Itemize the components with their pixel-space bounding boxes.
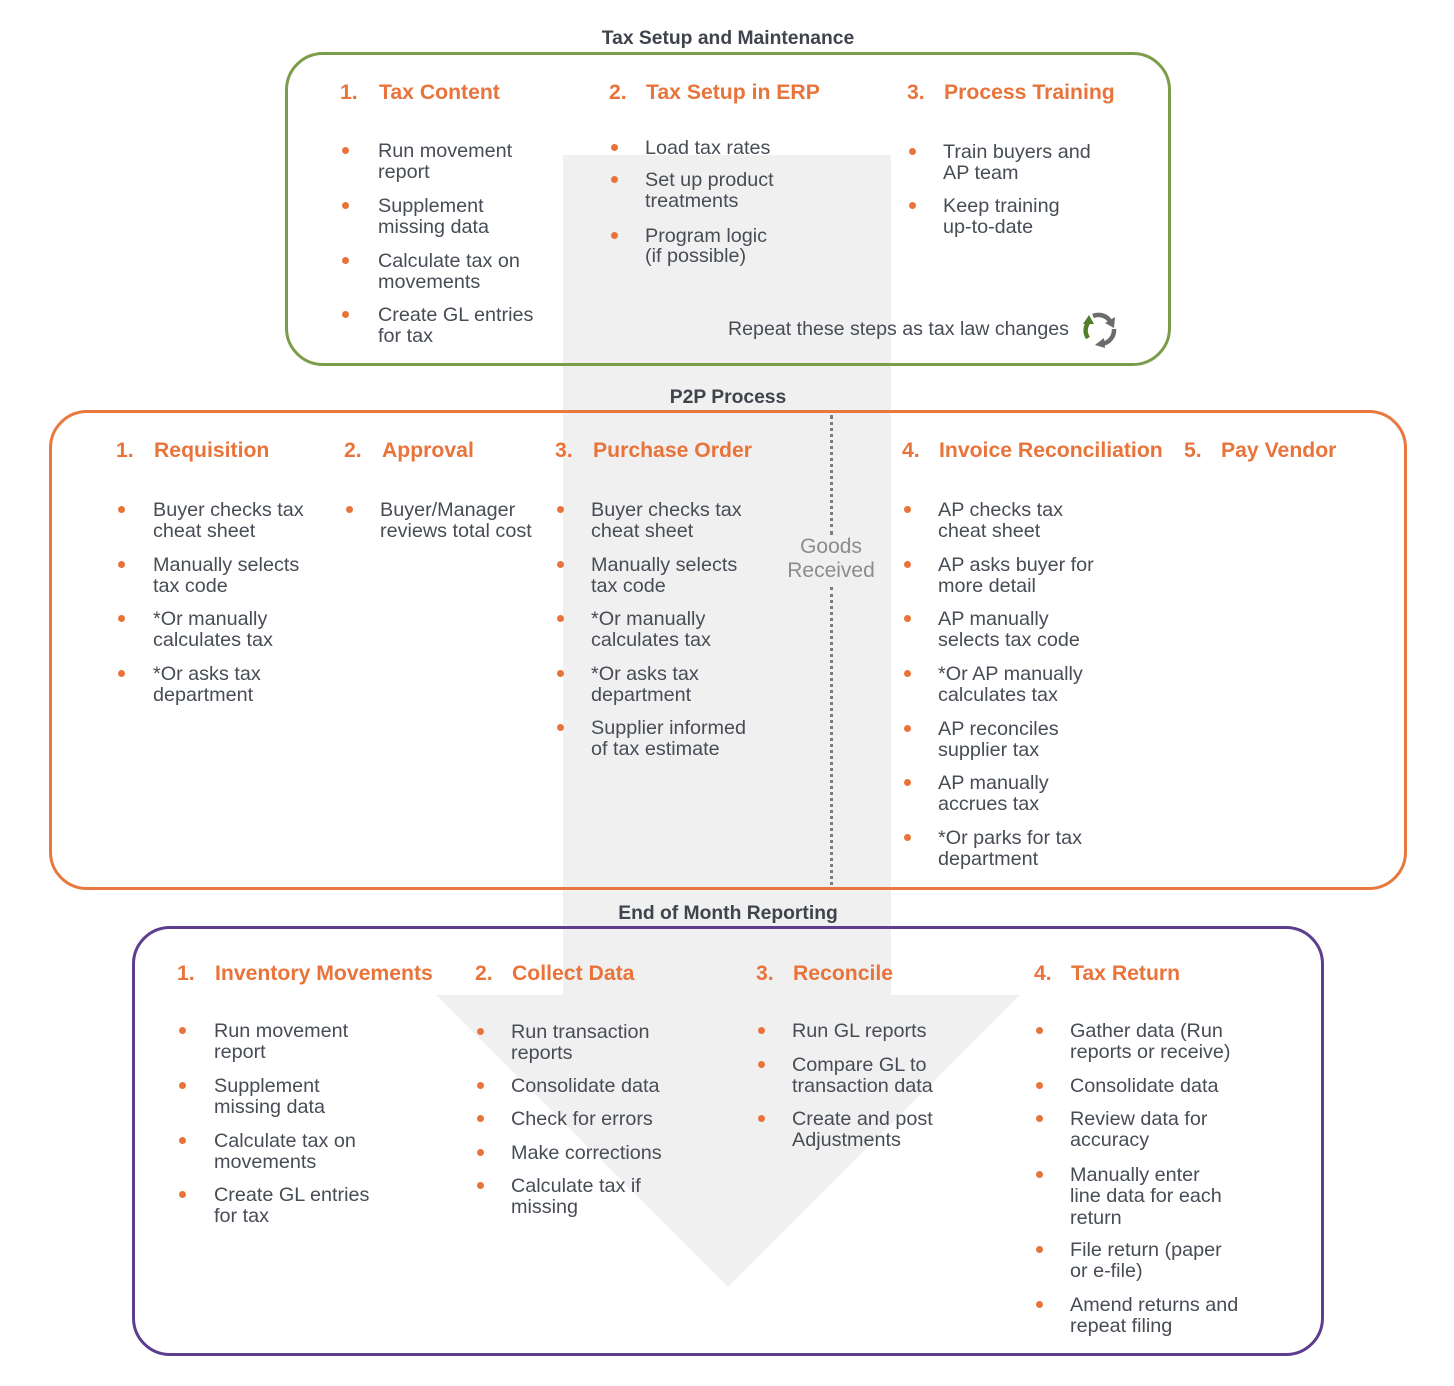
bullet: Review data for: [1070, 1108, 1207, 1130]
bullet: [938, 664, 1083, 706]
bullet: [943, 142, 1091, 184]
bullet: Set up product: [645, 168, 774, 190]
bullet: Consolidate data: [511, 1074, 659, 1096]
bullet: missing: [511, 1196, 578, 1218]
bullet: tax code: [591, 575, 666, 597]
panel: End of Month Reporting: [132, 926, 1324, 1356]
step heading: 1.: [340, 81, 358, 104]
bullet: Keep training: [943, 194, 1060, 216]
bullet: [645, 226, 767, 266]
bullet: Supplier informed: [591, 716, 746, 738]
bullet: movements: [378, 271, 480, 293]
column: Requisition: [116, 439, 304, 706]
column: Purchase Order: [555, 439, 752, 760]
bullet: Amend returns and: [1070, 1294, 1238, 1316]
bullet: missing data: [378, 216, 489, 238]
step heading: Inventory Movements: [215, 962, 433, 985]
bullet: [378, 304, 533, 348]
bullet: or e-file): [1070, 1260, 1143, 1282]
bullet: [1070, 1020, 1231, 1064]
heading: P2P Process: P2P Process: [670, 387, 786, 408]
bullet: Calculate tax on: [378, 250, 520, 272]
bullet: Load tax rates: [645, 136, 770, 158]
bullet: accrues tax: [938, 793, 1039, 815]
bullet: (if possible): [645, 244, 746, 266]
step heading: 3.: [555, 439, 573, 462]
bullet: AP manually: [938, 608, 1049, 630]
bullet: cheat sheet: [938, 520, 1040, 542]
bullet: [1070, 1108, 1207, 1152]
label: Goods Received: Goods: [800, 535, 862, 558]
bullet: [943, 196, 1060, 238]
bullet: Train buyers and: [943, 140, 1091, 162]
bullet: treatments: [645, 190, 738, 212]
bullet: Manually enter: [1070, 1164, 1200, 1186]
step heading: Pay Vendor: [1221, 439, 1336, 462]
column: Approval: [344, 439, 532, 542]
step heading: Tax Setup in ERP: [646, 81, 820, 104]
step heading: 3.: [756, 962, 774, 985]
bullet: Create and post: [792, 1108, 933, 1130]
bullet: [511, 1176, 641, 1218]
step heading: 1.: [116, 439, 134, 462]
bullet: up-to-date: [943, 216, 1033, 238]
bullet: movements: [214, 1151, 316, 1173]
bullet: [792, 1108, 933, 1152]
bullet: Create GL entries: [214, 1184, 369, 1206]
bullet: [378, 250, 520, 294]
bullet: AP team: [943, 162, 1019, 184]
bullet: [214, 1076, 325, 1118]
bullet: AP manually: [938, 772, 1049, 794]
bullet: [645, 170, 774, 212]
heading: End of Month Reporting: End of Month Reporting: [618, 903, 838, 924]
bullet: [792, 1054, 933, 1098]
bullet: [938, 772, 1049, 816]
bullet: [938, 500, 1063, 542]
bullet: Make corrections: [511, 1142, 662, 1164]
bullet: Manually selects: [153, 554, 299, 576]
step heading: Approval: [382, 439, 474, 462]
bullet: Buyer/Manager: [380, 498, 515, 520]
step heading: 1.: [177, 962, 195, 985]
bullet: missing data: [214, 1096, 325, 1118]
bullet: Program logic: [645, 224, 767, 246]
column: Tax Return: [1034, 962, 1238, 1337]
bullet: Supplement: [378, 194, 484, 216]
bullet: [511, 1022, 650, 1064]
bullet: [591, 554, 737, 598]
bullet: *Or parks for tax: [938, 826, 1082, 848]
repeat note: Repeat these steps as tax law changes: [728, 318, 1069, 340]
bullet: selects tax code: [938, 629, 1080, 651]
step heading: Requisition: [154, 439, 269, 462]
bullet: [378, 140, 512, 184]
column: Invoice Reconciliation: [902, 439, 1163, 870]
bullet: cheat sheet: [591, 520, 693, 542]
bullet: [591, 500, 742, 542]
bullet: department: [938, 848, 1038, 870]
bullet: *Or asks tax: [591, 662, 699, 684]
panel: P2P Process: [49, 410, 1407, 890]
bullet: return: [1070, 1206, 1122, 1228]
bullet: Compare GL to: [792, 1054, 926, 1076]
column: Process Training: [907, 81, 1115, 238]
panel: Tax Setup and Maintenance: [285, 52, 1171, 366]
bullet: [938, 828, 1082, 870]
bullet: reports or receive): [1070, 1041, 1231, 1063]
bullet: [938, 554, 1094, 598]
step heading: 4.: [1034, 962, 1052, 985]
bullet: *Or manually: [591, 608, 705, 630]
bullet: [938, 718, 1059, 762]
bullet: [153, 664, 261, 706]
bullet: Gather data (Run: [1070, 1020, 1223, 1042]
bullet: Create GL entries: [378, 304, 533, 326]
bullet: Run GL reports: [792, 1020, 926, 1042]
bullet: calculates tax: [938, 684, 1058, 706]
bullet: [380, 500, 532, 542]
bullet: [153, 608, 273, 652]
bullet: [1070, 1294, 1238, 1338]
bullet: Buyer checks tax: [591, 498, 742, 520]
bullet: repeat filing: [1070, 1315, 1172, 1337]
bullet: calculates tax: [591, 629, 711, 651]
step heading: 5.: [1184, 439, 1202, 462]
bullet: reviews total cost: [380, 520, 532, 542]
bullet: Consolidate data: [1070, 1074, 1218, 1096]
bullet: [591, 664, 699, 706]
bullet: cheat sheet: [153, 520, 255, 542]
bullet: AP asks buyer for: [938, 554, 1094, 576]
column: Tax Content: [340, 81, 533, 347]
bullet: [214, 1020, 348, 1064]
bullet: more detail: [938, 575, 1036, 597]
bullet: line data for each: [1070, 1185, 1222, 1207]
step heading: Reconcile: [793, 962, 893, 985]
bullet: calculates tax: [153, 629, 273, 651]
label: Goods Received: Received: [787, 559, 875, 582]
bullet: [1070, 1164, 1222, 1229]
step heading: 3.: [907, 81, 925, 104]
bullet: File return (paper: [1070, 1238, 1222, 1260]
bullet: [1070, 1240, 1222, 1282]
bullet: department: [153, 684, 253, 706]
bullet: *Or AP manually: [938, 662, 1083, 684]
bullet: AP reconciles: [938, 718, 1059, 740]
bullet: tax code: [153, 575, 228, 597]
column: Pay Vendor: [1184, 439, 1336, 462]
step heading: 2.: [609, 81, 627, 104]
step heading: 4.: [902, 439, 920, 462]
bullet: Supplement: [214, 1074, 320, 1096]
bullet: department: [591, 684, 691, 706]
bullet: [153, 500, 304, 542]
icon: repeat cycle: [1083, 312, 1116, 348]
bullet: Run movement: [214, 1020, 348, 1042]
bullet: [214, 1184, 369, 1228]
bullet: report: [214, 1041, 266, 1063]
bullet: [938, 608, 1080, 652]
bullet: [153, 554, 299, 598]
bullet: Buyer checks tax: [153, 498, 304, 520]
bullet: Calculate tax on: [214, 1130, 356, 1152]
bullet: AP checks tax: [938, 498, 1063, 520]
bullet: supplier tax: [938, 739, 1039, 761]
step heading: Invoice Reconciliation: [939, 439, 1163, 462]
bullet: of tax estimate: [591, 738, 720, 760]
bullet: Manually selects: [591, 554, 737, 576]
column: Inventory Movements: [177, 962, 433, 1227]
bullet: report: [378, 161, 430, 183]
bullet: for tax: [214, 1205, 269, 1227]
bullet: Adjustments: [792, 1129, 901, 1151]
step heading: Collect Data: [512, 962, 634, 985]
bullet: Calculate tax if: [511, 1174, 641, 1196]
bullet: Run transaction: [511, 1020, 650, 1042]
step heading: 2.: [344, 439, 362, 462]
step heading: Purchase Order: [593, 439, 752, 462]
bullet: Run movement: [378, 140, 512, 162]
column: Collect Data: [475, 962, 662, 1218]
bullet: *Or manually: [153, 608, 267, 630]
label: Goods Received: [787, 535, 875, 582]
bullet: Check for errors: [511, 1108, 653, 1130]
bullet: [591, 608, 711, 652]
step heading: Tax Return: [1071, 962, 1180, 985]
bullet: *Or asks tax: [153, 662, 261, 684]
bullet: reports: [511, 1042, 573, 1064]
bullet: transaction data: [792, 1075, 933, 1097]
column: Reconcile: [756, 962, 933, 1151]
bullet: [214, 1130, 356, 1174]
step heading: Process Training: [944, 81, 1115, 104]
goods received marker: [787, 415, 875, 885]
heading: Tax Setup and Maintenance: Tax Setup and Maintenance: [602, 28, 854, 49]
bullet: [591, 718, 746, 760]
bullet: [378, 196, 489, 238]
bullet: accuracy: [1070, 1129, 1149, 1151]
step heading: Tax Content: [379, 81, 500, 104]
bullet: for tax: [378, 325, 433, 347]
column: Tax Setup in ERP: [609, 81, 820, 266]
step heading: 2.: [475, 962, 493, 985]
